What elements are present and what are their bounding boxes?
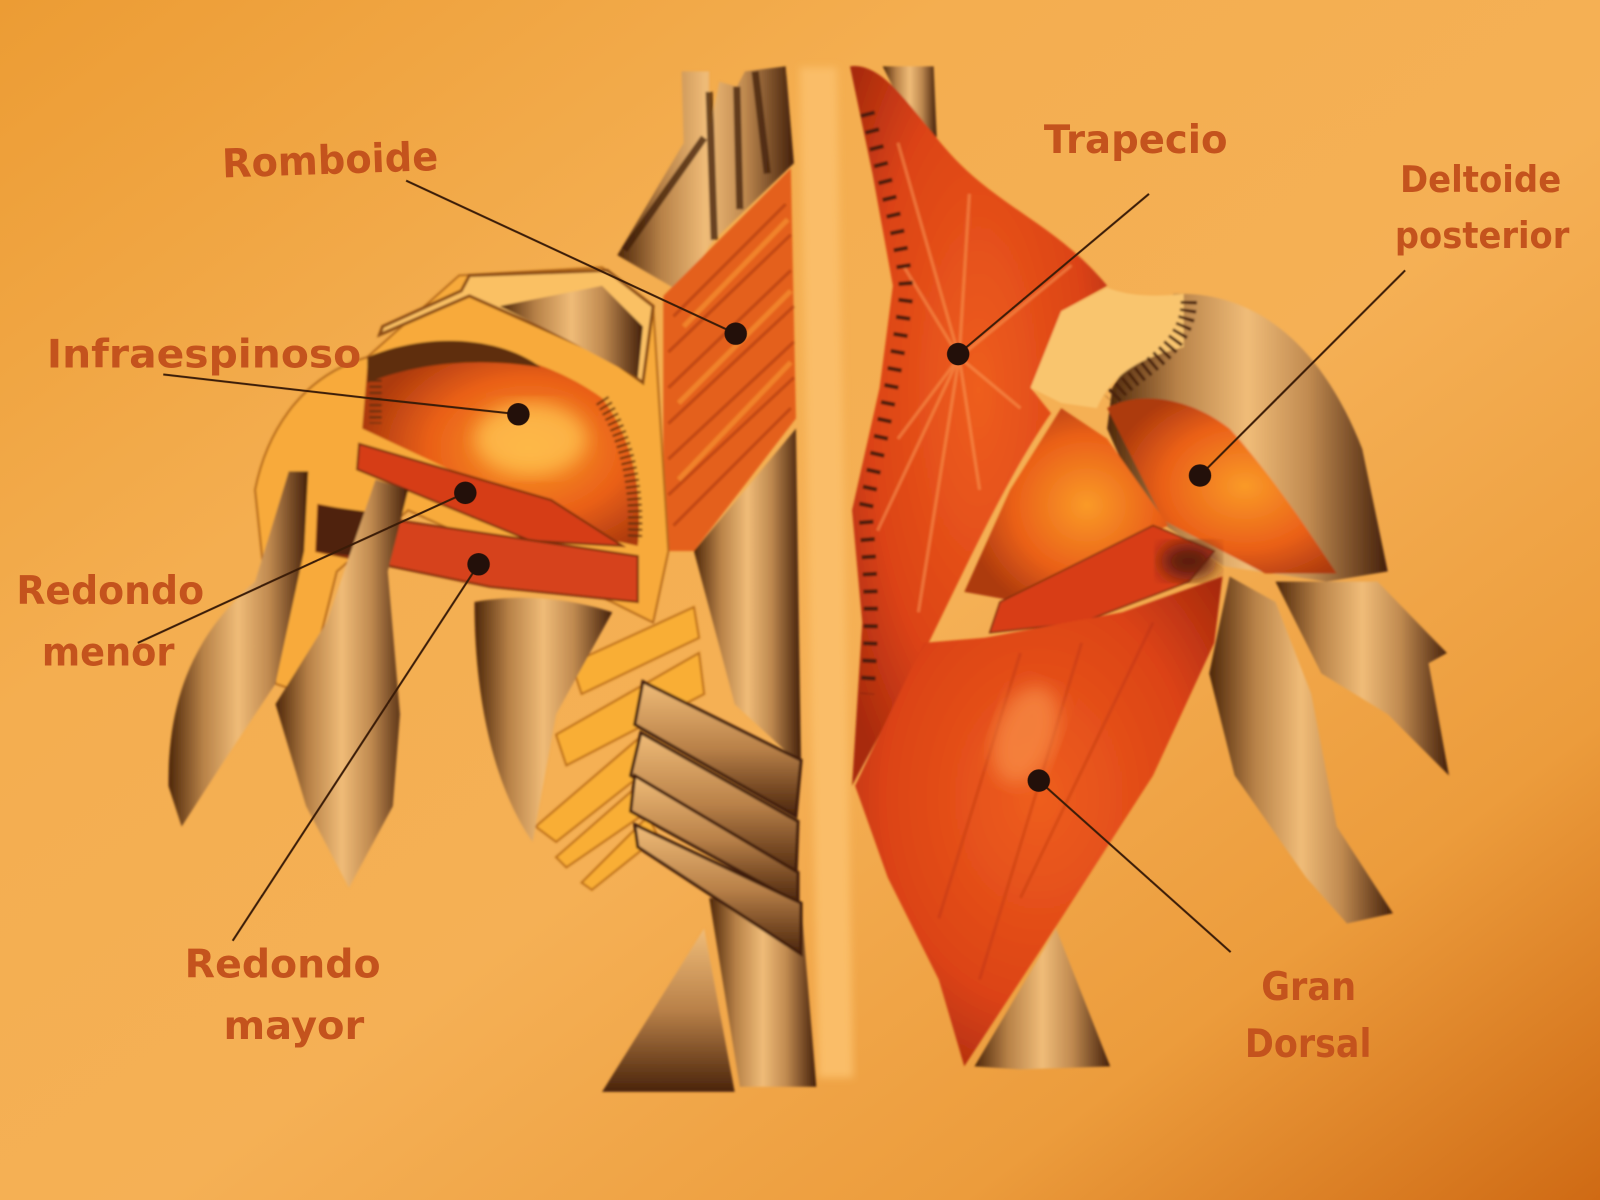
label: Redondo mayor <box>185 943 381 1049</box>
spine band <box>800 67 853 1078</box>
deep shoulder muscles <box>964 408 1168 602</box>
label: Deltoide posterior <box>1395 158 1569 257</box>
shadow under deltoid <box>1160 543 1217 580</box>
neck muscles <box>617 66 794 291</box>
label: Gran Dorsal <box>1245 965 1371 1067</box>
arm tendons right <box>1209 577 1449 923</box>
label: Gran Dorsal: Dorsal <box>1245 1022 1371 1067</box>
latissimus dorsi muscle <box>855 577 1222 1066</box>
figure: left side deep muscles <box>168 66 816 1092</box>
lower left muscle columns <box>602 898 816 1092</box>
scapular spine <box>380 270 653 383</box>
lower muscle <box>974 929 1110 1069</box>
label: Redondo menor: Redondo <box>16 569 204 614</box>
teres minor muscle <box>357 444 622 546</box>
upper serratus muscle <box>474 598 612 842</box>
neck right <box>883 66 937 138</box>
lower back erector <box>694 429 801 765</box>
figure: right side superficial muscles <box>850 66 1449 1069</box>
acromion <box>1031 288 1184 408</box>
highlights <box>474 403 587 474</box>
deltoid muscle red <box>1107 398 1337 573</box>
infraspinatus muscle <box>362 341 639 546</box>
deltoid tendon hatching <box>1110 301 1189 400</box>
trapezius muscle <box>850 66 1107 786</box>
oblique muscle bands <box>631 682 801 954</box>
supraspinatus <box>500 286 643 378</box>
marker dots <box>454 322 1211 792</box>
label: Redondo menor <box>16 569 204 675</box>
label: Trapecio: Trapecio <box>1044 118 1228 163</box>
deltoid muscle outer <box>1107 294 1388 582</box>
serratus bands <box>536 607 704 890</box>
teres major muscle <box>316 505 638 602</box>
label: Infraespinoso: Infraespinoso <box>47 332 361 377</box>
label: Romboide: Romboide <box>221 134 439 188</box>
label: Redondo menor: menor <box>42 630 174 675</box>
label: Redondo mayor: mayor <box>223 1004 364 1049</box>
label: Redondo mayor: Redondo <box>185 943 381 988</box>
label: Deltoide posterior: Deltoide <box>1400 158 1561 201</box>
scapula <box>255 267 668 694</box>
label: Gran Dorsal: Gran <box>1261 965 1356 1010</box>
rhomboid muscle <box>663 168 796 551</box>
leader lines <box>138 181 1405 952</box>
label: Deltoide posterior: posterior <box>1395 214 1569 257</box>
left arm muscles <box>168 471 408 888</box>
